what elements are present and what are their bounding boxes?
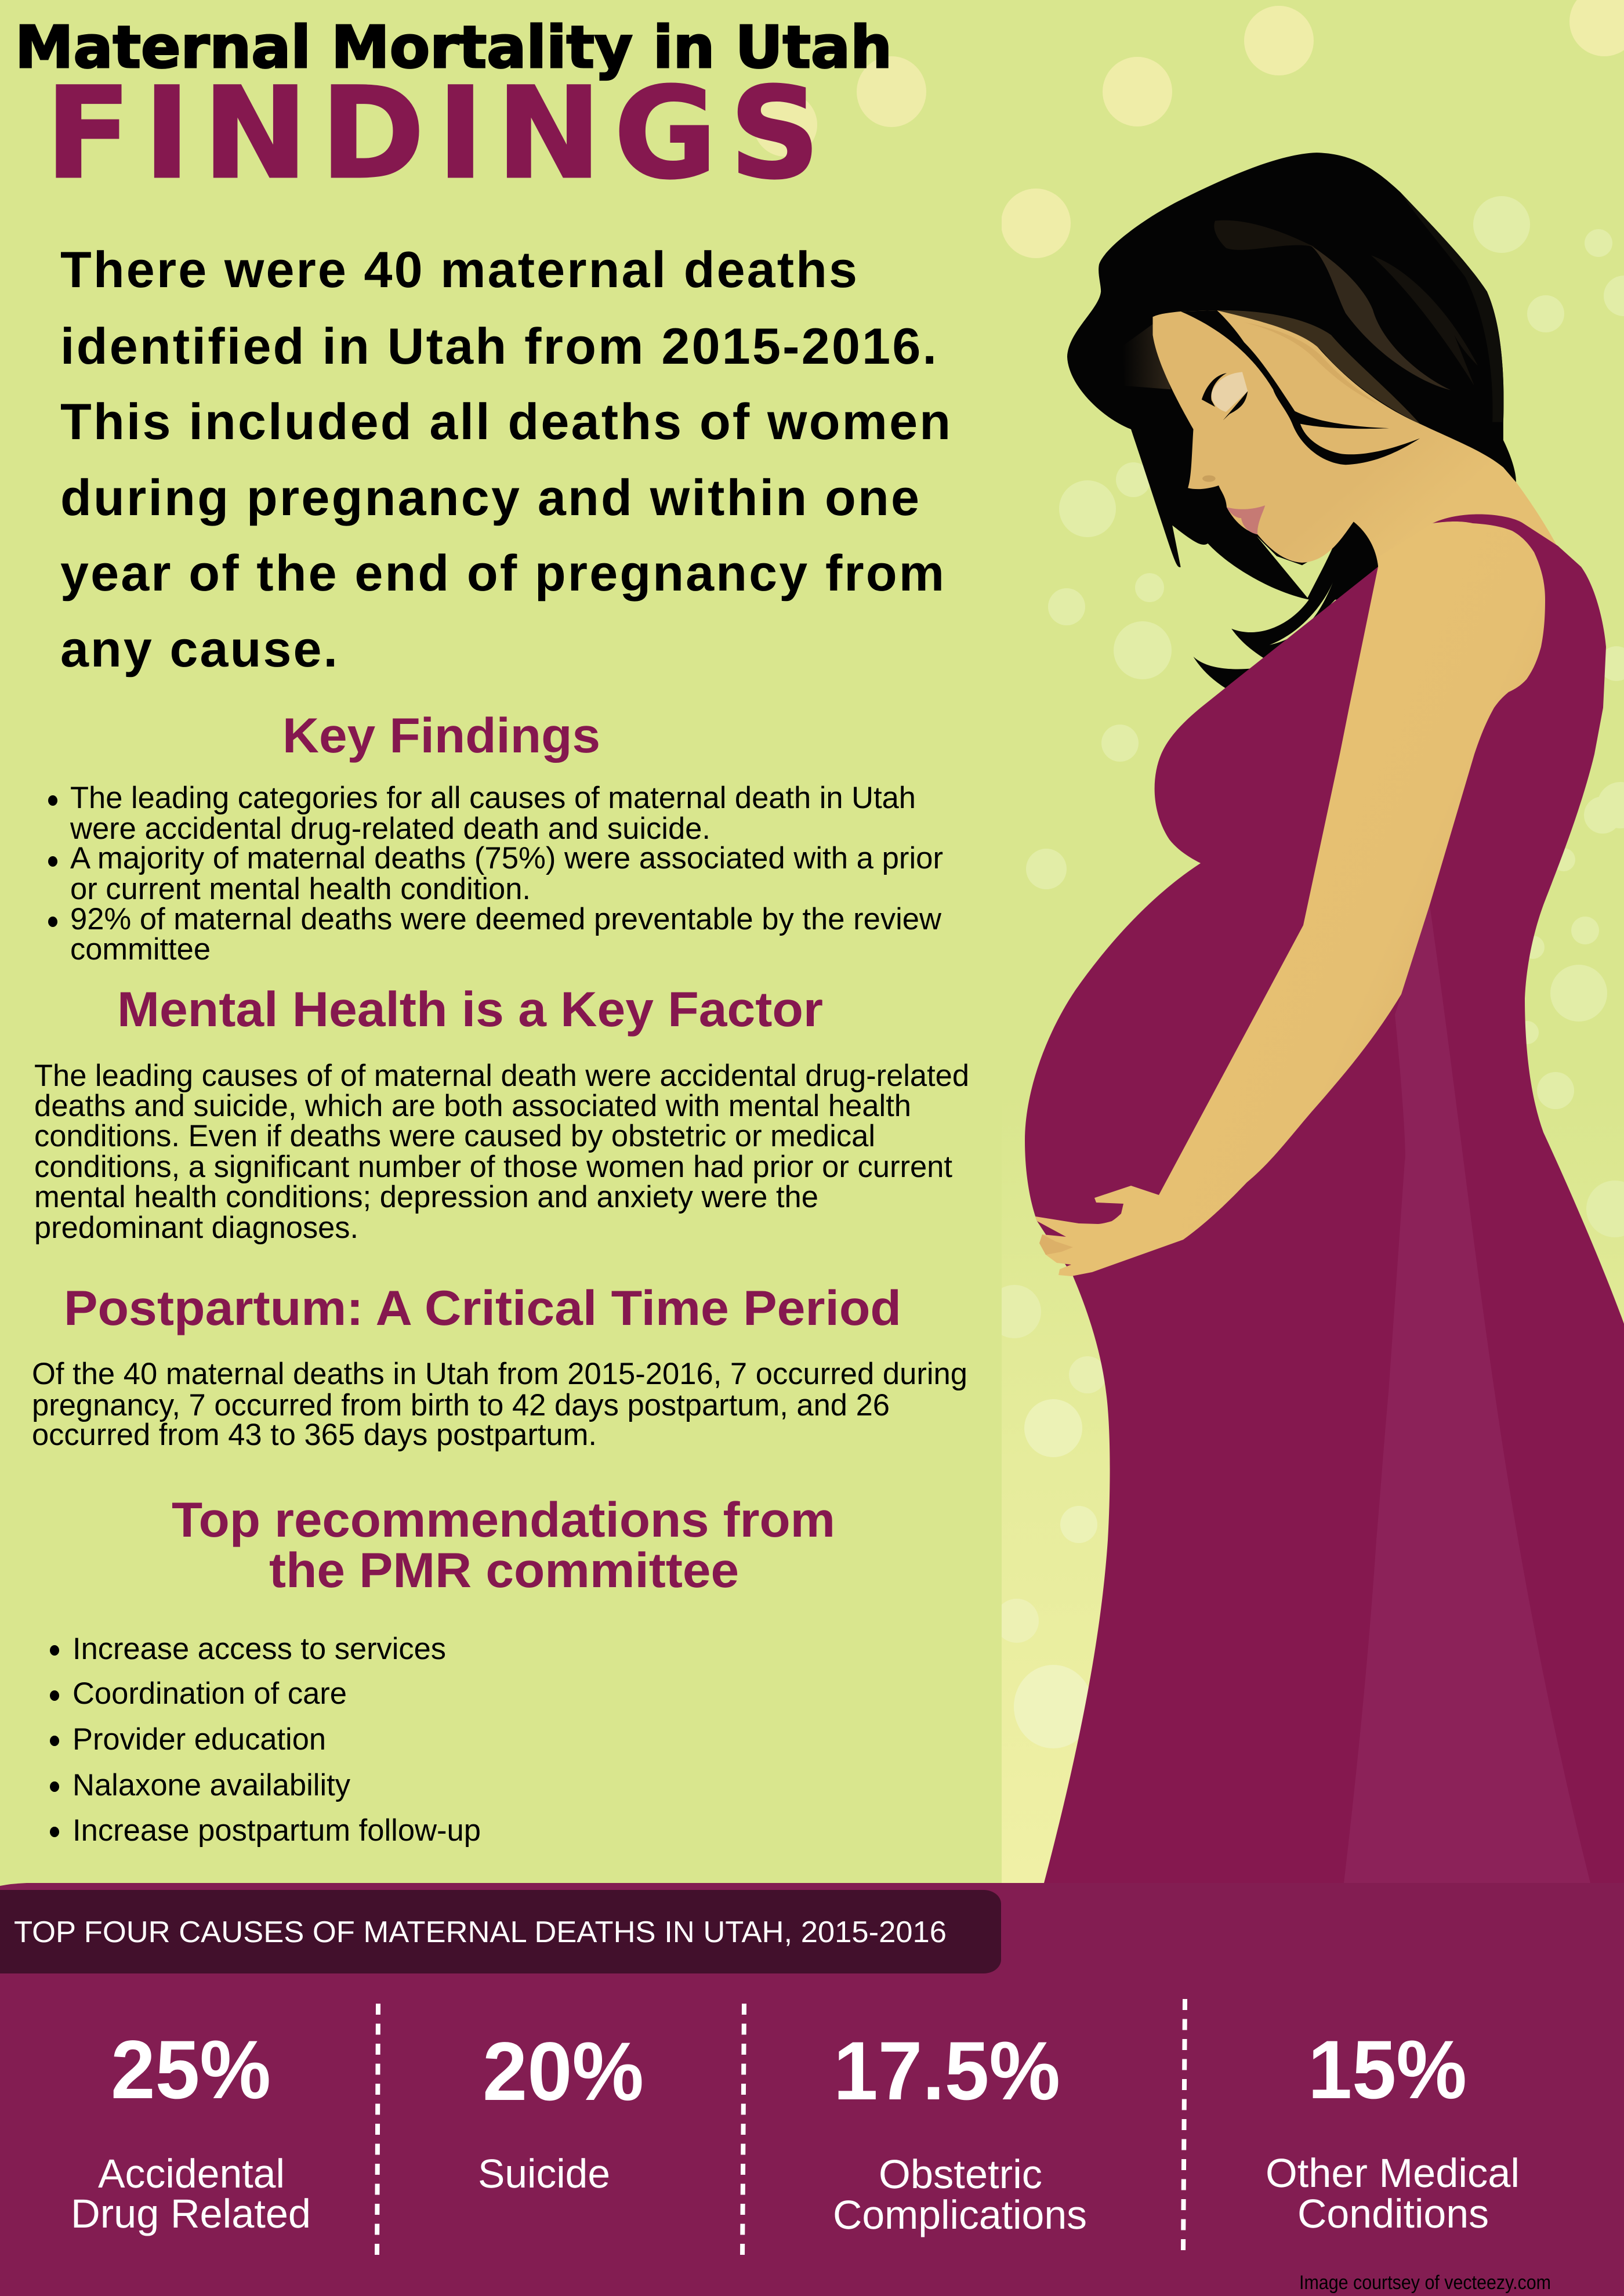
mental health paragraph: conditions. Even if deaths were caused by obstetric or medical <box>34 1119 875 1153</box>
title: Maternal Mortality in Utah <box>15 13 892 81</box>
dress highlight panel <box>1344 905 1590 1883</box>
recommendations bullet list: Coordination of care <box>72 1676 347 1711</box>
key findings bullet list <box>48 781 943 966</box>
panel: top four causes band <box>0 1883 1624 2296</box>
nose <box>1202 475 1216 482</box>
band title bar <box>0 1890 1001 1973</box>
key findings bullet list: The leading categories for all causes of maternal death in Utah <box>70 781 916 815</box>
stat: suicide: 20% <box>483 2026 644 2118</box>
intro paragraph <box>60 241 951 678</box>
stat: accidental drug related: 25% <box>111 2024 271 2116</box>
key findings bullet list: 92% of maternal deaths were deemed preventable by the review <box>70 902 942 936</box>
stat: suicide <box>478 2026 644 2196</box>
stat: other medical conditions <box>1266 2024 1520 2236</box>
image credit: Image courtsey of vecteezy.com <box>1299 2272 1551 2294</box>
heading: recommendations: Top recommendations from <box>172 1493 835 1548</box>
hair front strands and face details <box>1181 310 1420 534</box>
stat: obstetric complications <box>833 2025 1087 2237</box>
stat: obstetric complications: Complications <box>833 2192 1087 2237</box>
skin: face and neck <box>1153 310 1558 574</box>
stat: other medical conditions: 15% <box>1308 2024 1467 2116</box>
mental health paragraph: deaths and suicide, which are both associated with mental health <box>34 1089 911 1123</box>
arm and hand <box>1035 522 1545 1276</box>
eye <box>1202 372 1248 420</box>
postpartum paragraph: Of the 40 maternal deaths in Utah from 2015-2016, 7 occurred during <box>32 1357 967 1391</box>
heading: key findings: Key Findings <box>282 708 600 763</box>
key findings bullet list: or current mental health condition. <box>70 872 531 906</box>
heading: recommendations <box>172 1493 835 1598</box>
heading: findings: FINDINGS <box>45 61 820 207</box>
band title bar: TOP FOUR CAUSES OF MATERNAL DEATHS IN UTAH, 2015-2016 <box>14 1915 947 1949</box>
stat: other medical conditions: Conditions <box>1297 2191 1489 2236</box>
postpartum paragraph: occurred from 43 to 365 days postpartum. <box>32 1418 597 1452</box>
stat: accidental drug related <box>71 2024 311 2236</box>
key findings bullet list: were accidental drug-related death and suicide. <box>70 812 710 846</box>
heading: mental health: Mental Health is a Key Factor <box>117 982 823 1037</box>
dress <box>1025 515 1624 1883</box>
stat: accidental drug related: Accidental <box>98 2151 285 2196</box>
postpartum paragraph <box>32 1357 967 1452</box>
illustration: pregnant woman <box>1025 153 1624 1883</box>
stat: accidental drug related: Drug Related <box>71 2191 311 2236</box>
recommendations bullet list <box>50 1632 481 1848</box>
mental health paragraph: The leading causes of of maternal death were accidental drug-related <box>34 1059 969 1093</box>
intro paragraph: during pregnancy and within one <box>60 469 919 526</box>
stat: suicide: Suicide <box>478 2151 610 2196</box>
intro paragraph: year of the end of pregnancy from <box>60 544 944 602</box>
mental health paragraph: predominant diagnoses. <box>34 1211 358 1245</box>
mental health paragraph <box>34 1059 969 1245</box>
recommendations bullet list: Increase access to services <box>72 1632 446 1666</box>
recommendations bullet list: Provider education <box>72 1722 326 1757</box>
postpartum paragraph: pregnancy, 7 occurred from birth to 42 days postpartum, and 26 <box>32 1388 890 1422</box>
key findings bullet list: A majority of maternal deaths (75%) were associated with a prior <box>70 841 943 875</box>
intro paragraph: This included all deaths of women <box>60 393 951 450</box>
background panel with bubbles <box>753 0 1624 1883</box>
mental health paragraph: conditions, a significant number of those women had prior or current <box>34 1150 952 1184</box>
stat: obstetric complications: Obstetric <box>879 2152 1042 2197</box>
recommendations bullet list: Increase postpartum follow-up <box>72 1813 481 1848</box>
key findings bullet list: committee <box>70 932 211 966</box>
intro paragraph: There were 40 maternal deaths <box>60 241 857 298</box>
stat: other medical conditions: Other Medical <box>1266 2150 1520 2196</box>
lips <box>1227 505 1265 534</box>
heading: recommendations: the PMR committee <box>269 1543 739 1598</box>
heading: postpartum: Postpartum: A Critical Time Period <box>64 1281 901 1336</box>
recommendations bullet list: Nalaxone availability <box>72 1768 350 1802</box>
mental health paragraph: mental health conditions; depression and anxiety were the <box>34 1180 818 1214</box>
hair back mass <box>1067 153 1516 689</box>
intro paragraph: any cause. <box>60 620 338 678</box>
stat: obstetric complications: 17.5% <box>833 2025 1060 2117</box>
intro paragraph: identified in Utah from 2015-2016. <box>60 317 937 375</box>
